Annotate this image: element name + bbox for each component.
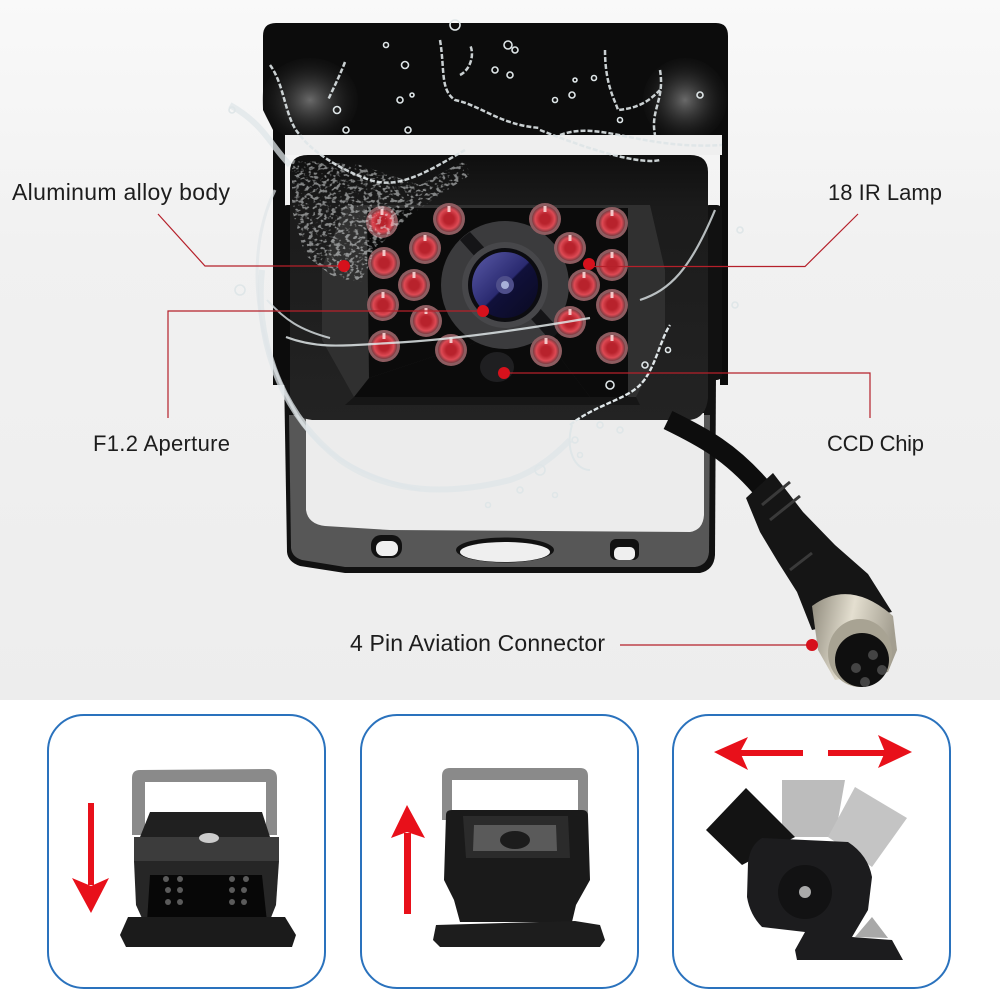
- callout: CCD Chip: CCD Chip: [827, 431, 924, 456]
- splash: streams on bracket: [270, 40, 722, 183]
- aviation connector: [746, 473, 897, 687]
- IR LEDs: [366, 203, 628, 367]
- splash: sweeping arcs: [230, 105, 570, 490]
- callout: 18 IR Lamp: 18 IR Lamp: [828, 180, 942, 205]
- panel: tilt down: [48, 715, 325, 988]
- panel: swivel: [673, 715, 950, 988]
- lens: [441, 221, 569, 349]
- side pivots: [282, 205, 298, 380]
- panel: tilt up: [361, 715, 638, 988]
- callout: 4 Pin Aviation Connector: [350, 630, 818, 656]
- callout: F1.2 Aperture: [93, 305, 489, 456]
- callout: Aluminum alloy body: Aluminum alloy body: [12, 179, 230, 205]
- callout: 18 IR Lamp: [583, 180, 942, 270]
- side bevels: [322, 205, 665, 397]
- lower mounting bracket: [284, 372, 716, 573]
- arrow: up: [391, 805, 425, 914]
- camera housing: [290, 155, 708, 420]
- water splash: [229, 20, 743, 508]
- camera: tilted up: [433, 768, 605, 947]
- arrow: right: [828, 735, 912, 768]
- splash: droplets: [229, 20, 743, 508]
- camera: swivel positions: [706, 780, 907, 960]
- callout: F1.2 Aperture: F1.2 Aperture: [93, 431, 230, 456]
- camera: tilted down: [120, 769, 296, 947]
- dark front window: [367, 208, 628, 397]
- callout: Aluminum alloy body: [12, 179, 350, 272]
- cable: [668, 420, 760, 486]
- bracket holes: [456, 538, 554, 562]
- callout: 4 Pin Aviation Connector: 4 Pin Aviation Connector: [350, 630, 605, 656]
- arrow: left: [714, 737, 803, 770]
- background panel: [0, 0, 1000, 700]
- CCD chip: [480, 352, 514, 382]
- camera illustration: [229, 20, 897, 687]
- top mounting bracket: [262, 23, 728, 385]
- callout: CCD Chip: [498, 367, 924, 456]
- splash: mottled patch: [292, 160, 470, 282]
- arrow: down: [72, 803, 109, 913]
